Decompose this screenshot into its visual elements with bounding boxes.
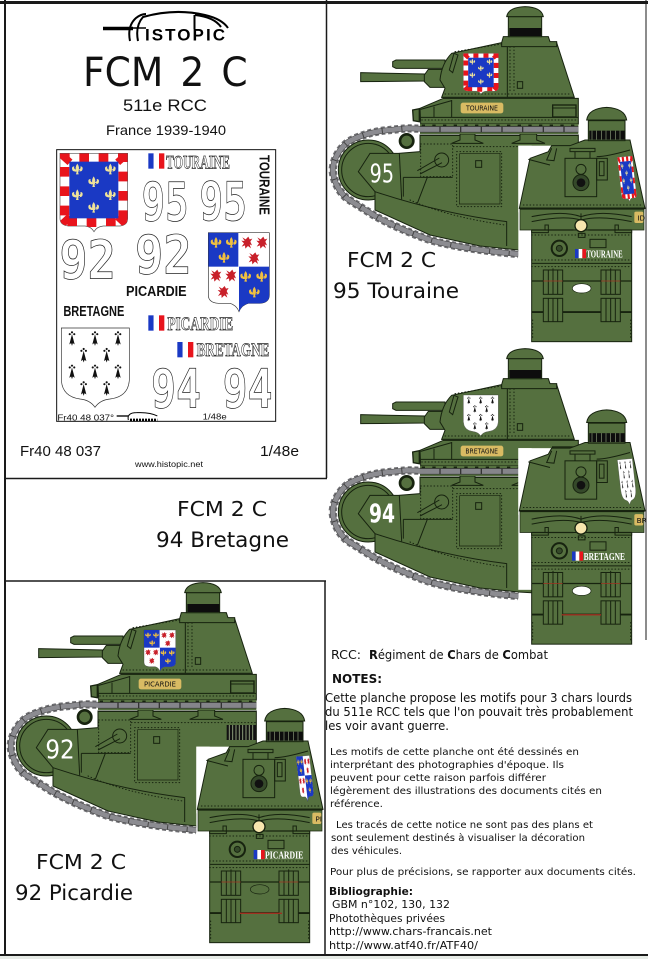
front emblem: Picardie	[296, 755, 315, 802]
notes intro: les voir avant guerre.	[325, 718, 449, 733]
website: www.histopic.net	[134, 459, 204, 469]
decal: numbers 94: 94	[223, 357, 273, 420]
decal scale: 1/48e	[203, 412, 227, 421]
notes paragraph: motifs: interprétant des photographies d'époque. Ils	[330, 760, 564, 771]
RCC definition: Régiment de Chars de Combat	[369, 648, 548, 662]
logo: Histopic	[103, 12, 228, 44]
notes paragraph: motifs: référence.	[330, 799, 383, 810]
notes paragraph: motifs: peuvent pour cette raison parfois différer	[330, 773, 546, 784]
notes paragraph: motifs: Les motifs de cette planche ont été dessinés en	[330, 747, 579, 758]
notes paragraph: traces: des véhicules.	[331, 846, 402, 857]
decal: numbers 92: 92	[135, 223, 192, 286]
front flag and name	[254, 850, 304, 861]
caption: 92 Picardie	[15, 850, 133, 906]
subtitle: country and dates: France 1939-1940	[106, 122, 226, 138]
logo: Histopic: ISTOPIC	[145, 26, 225, 44]
decal sheet reference: Fr40 48 037°	[57, 413, 114, 423]
hatch	[572, 284, 591, 293]
RCC definition: RCC:	[331, 648, 361, 662]
decal: Bretagne flag and name: BRETAGNE	[197, 340, 269, 361]
decal: numbers 94	[151, 357, 273, 420]
notes paragraph: references: Pour plus de précisions, se rapporter aux documents cités.	[330, 867, 636, 878]
nameplate: Touraine	[461, 103, 503, 113]
decal: numbers 94: 94	[151, 357, 201, 420]
decal: Bretagne flag and name	[177, 340, 269, 361]
notes heading: NOTES:	[332, 671, 382, 686]
notes intro	[325, 690, 633, 733]
notes paragraph: traces: sont seulement destinés à visualiser la décoration	[331, 833, 585, 844]
caption: 95 Touraine	[333, 248, 459, 304]
front flag and name	[575, 249, 623, 260]
front emblem: Bretagne	[617, 459, 637, 505]
decal: numbers 95	[142, 170, 247, 234]
title: FCM 2 C	[83, 50, 248, 96]
tank number 94: 94	[369, 498, 395, 528]
bibliography: http://www.chars-francais.net	[329, 925, 493, 938]
turret emblem: Touraine	[463, 53, 499, 94]
decal: numbers 95: 95	[142, 171, 189, 234]
decal: Bretagne label: BRETAGNE	[63, 304, 124, 320]
bottom strip	[0, 955, 648, 959]
turret emblem: Bretagne	[463, 395, 498, 436]
turret emblem: Picardie	[144, 630, 176, 671]
decal sheet	[57, 150, 276, 423]
plate fragment: ID	[637, 214, 645, 223]
tank front view: 92 Picardie	[196, 708, 324, 943]
caption: 94 Bretagne: FCM 2 C	[177, 497, 267, 521]
notes intro: Cette planche propose les motifs pour 3 chars lourds	[325, 690, 632, 705]
decal: Touraine shield	[60, 153, 128, 232]
notes intro: du 511e RCC tels que l'on pouvait très probablement	[325, 704, 633, 719]
front flag and name	[572, 551, 625, 563]
plate fragment: PI	[315, 815, 322, 824]
decal: Picardie shield	[208, 233, 270, 312]
tank side view: 94 Bretagne	[333, 349, 578, 596]
tank front view: 94 Bretagne	[518, 410, 647, 644]
front flag and name: TOURAINE	[586, 249, 623, 260]
notes paragraph: traces: Les tracés de cette notice ne sont pas des plans et	[336, 820, 593, 831]
nameplate: Touraine: TOURAINE	[465, 105, 498, 113]
decal: Picardie flag and name: PICARDIE	[167, 314, 233, 335]
notes paragraph: motifs	[330, 747, 602, 810]
caption: 94 Bretagne: 94 Bretagne	[156, 528, 289, 553]
plate fragment	[634, 514, 647, 525]
nameplate: Bretagne: BRETAGNE	[465, 448, 498, 456]
red bar	[240, 911, 282, 915]
subtitle: regiment: 511e RCC	[123, 96, 207, 115]
caption: 94 Bretagne	[156, 497, 289, 553]
decal: Touraine flag and name	[148, 152, 230, 173]
bibliography: http://www.atf40.fr/ATF40/	[329, 939, 478, 952]
plate fragment	[312, 813, 322, 824]
hatch	[572, 586, 591, 595]
decal: numbers 92: 92	[59, 229, 116, 292]
product reference: Fr40 48 037	[20, 444, 101, 460]
red bar	[562, 613, 601, 617]
scale: 1/48e	[260, 443, 299, 460]
bibliography	[329, 885, 493, 952]
front flag and name: BRETAGNE	[584, 552, 625, 563]
notes paragraph: traces	[331, 820, 593, 857]
decal mini logo	[117, 413, 157, 420]
decal: numbers 95: 95	[199, 170, 247, 233]
caption: 92 Picardie: 92 Picardie	[15, 881, 133, 906]
tank side view: 95 Touraine	[333, 7, 578, 254]
decal: vertical Touraine: TOURAINE	[255, 155, 271, 215]
nameplate: Picardie: PICARDIE	[144, 681, 176, 689]
tank number 95: 95	[370, 159, 394, 189]
tank side view: 92 Picardie	[11, 583, 256, 830]
bibliography: Photothèques privées	[329, 912, 445, 925]
bibliography: GBM n°102, 130, 132	[332, 898, 450, 911]
decal: Bretagne shield	[61, 328, 129, 407]
nameplate: Picardie	[139, 679, 181, 689]
notes paragraph: motifs: légèrement des illustrations des documents cités en	[330, 786, 602, 797]
hatch	[250, 885, 269, 894]
plate fragment	[634, 212, 645, 223]
front emblem: Touraine	[617, 156, 637, 202]
caption: 95 Touraine: FCM 2 C	[347, 248, 436, 272]
caption: 95 Touraine: 95 Touraine	[333, 279, 459, 304]
decal: Touraine flag and name: TOURAINE	[166, 152, 230, 173]
decal: Picardie flag and name	[148, 314, 233, 335]
tank front view: 95 Touraine	[518, 107, 646, 342]
decal: numbers 92	[59, 223, 192, 292]
nameplate: Bretagne	[461, 446, 503, 456]
tank number 92: 92	[45, 735, 75, 765]
bibliography: Bibliographie:	[329, 885, 413, 898]
plate fragment: BR	[637, 516, 647, 525]
front flag and name: PICARDIE	[265, 850, 304, 861]
caption: 92 Picardie: FCM 2 C	[36, 850, 126, 874]
decal: Picardie label: PICARDIE	[126, 284, 187, 300]
